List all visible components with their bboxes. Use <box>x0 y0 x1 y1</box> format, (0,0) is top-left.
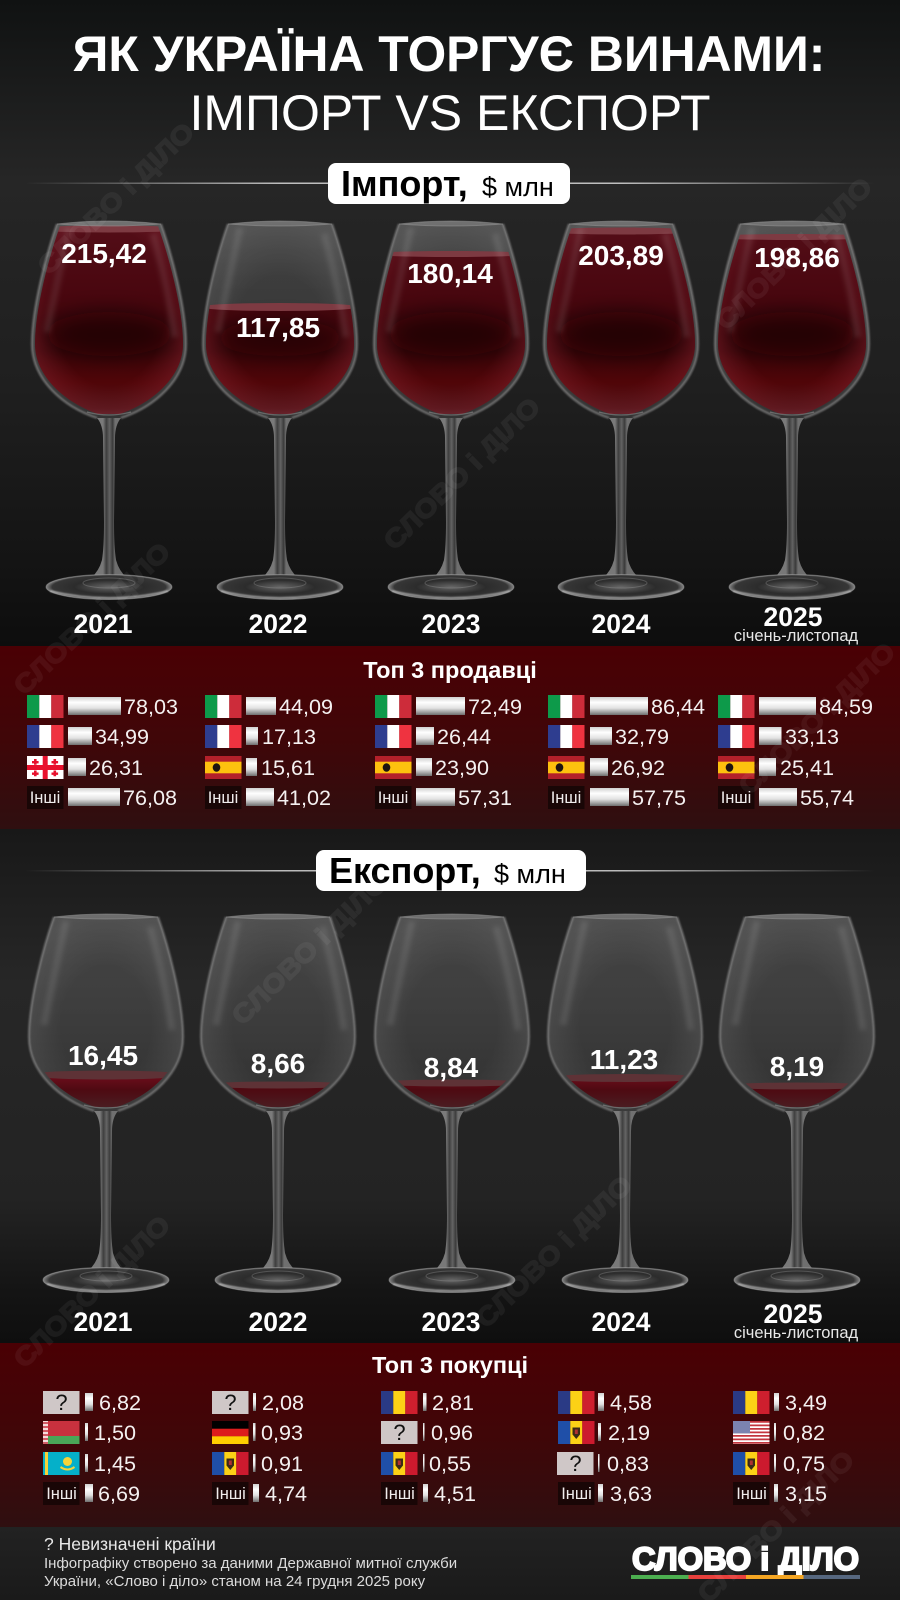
glass: import 2023: 180,14 <box>407 258 493 289</box>
column: buyers 2021: 1,50 <box>94 1420 136 1445</box>
column: sellers 2021: 78,03 <box>124 694 178 719</box>
year labels: export: 2024 <box>592 1307 651 1337</box>
glass: export 2022: 8,66 <box>251 1048 305 1079</box>
heading: top 3 sellers: Топ 3 продавці <box>363 657 537 683</box>
column: sellers 2021: 76,08 <box>123 785 177 810</box>
column: buyers 2021: ? <box>55 1390 68 1415</box>
glass: import 2025 <box>712 221 872 600</box>
column: buyers 2024: 3,63 <box>610 1481 652 1506</box>
column: buyers 2021 <box>43 1390 141 1506</box>
year labels: import <box>74 602 859 645</box>
column: buyers 2024: 0,83 <box>607 1451 649 1476</box>
column: sellers 2024 <box>548 694 705 810</box>
column: buyers 2021: 1,45 <box>94 1451 136 1476</box>
glass: import 2022: 117,85 <box>236 312 320 343</box>
column: buyers 2023: 2,81 <box>432 1390 474 1415</box>
column: sellers 2023: 23,90 <box>435 755 489 780</box>
glass: export 2024 <box>545 914 705 1292</box>
column: sellers 2023: Інші <box>378 789 408 807</box>
glass: export 2021 <box>26 914 186 1292</box>
watermarks: СЛОВО і ДІЛО <box>226 867 394 1031</box>
year labels: import: 2025 <box>764 602 822 632</box>
watermarks: СЛОВО і ДІЛО <box>470 1170 638 1334</box>
chart: export wine glasses <box>26 914 877 1292</box>
glass: export 2023: 8,84 <box>424 1052 479 1083</box>
column: sellers 2022: 15,61 <box>261 755 315 780</box>
title: ЯК УКРАЇНА ТОРГУЄ ВИНАМИ: <box>73 26 825 82</box>
glass: export 2021: 16,45 <box>68 1040 138 1071</box>
column: sellers 2023: 26,44 <box>437 724 491 749</box>
year labels: import: 2024 <box>592 609 651 639</box>
glass: export 2024: 11,23 <box>590 1044 658 1075</box>
column: buyers 2022: 4,74 <box>265 1481 307 1506</box>
heading: import: $ млн <box>482 172 554 202</box>
watermarks: СЛОВО і ДІЛО <box>8 537 176 701</box>
column: sellers 2025: 25,41 <box>780 755 834 780</box>
column: sellers 2023 <box>375 694 522 810</box>
watermarks: СЛОВО і ДІЛО <box>710 172 878 336</box>
glass: import 2022 <box>200 221 360 600</box>
column: buyers 2024: 4,58 <box>610 1390 652 1415</box>
panel: top 3 buyers <box>0 1343 900 1527</box>
watermarks: СЛОВО і ДІЛО <box>8 1210 176 1374</box>
column: sellers 2022: 17,13 <box>262 724 316 749</box>
column: sellers 2024: 26,92 <box>611 755 665 780</box>
title <box>73 26 825 141</box>
glass: export 2025 <box>717 914 877 1292</box>
column: buyers 2021: 6,69 <box>98 1481 140 1506</box>
column: sellers 2025: 33,13 <box>785 724 839 749</box>
year labels: import: 2023 <box>422 609 480 639</box>
column: sellers 2025: Інші <box>721 789 751 807</box>
column: buyers 2022: 2,08 <box>262 1390 304 1415</box>
column: buyers 2023 <box>381 1390 476 1506</box>
glass: import 2023 <box>371 221 531 600</box>
divider line: import <box>25 182 875 184</box>
footer note <box>44 1534 457 1590</box>
glass: import 2024: 203,89 <box>578 240 664 271</box>
column: buyers 2022: Інші <box>215 1485 246 1503</box>
year labels: export <box>74 1299 859 1342</box>
glass: import 2025: 198,86 <box>754 242 840 273</box>
column: buyers 2023: 0,96 <box>431 1420 473 1445</box>
glass: export 2022 <box>198 914 358 1292</box>
footer note: ? Невизначені країни <box>44 1534 216 1554</box>
title: ІМПОРТ VS ЕКСПОРТ <box>190 85 710 141</box>
column: buyers 2025: 3,15 <box>785 1481 827 1506</box>
year labels: import: 2022 <box>249 609 307 639</box>
column: sellers 2022: 41,02 <box>277 785 331 810</box>
column: sellers 2024: 32,79 <box>615 724 669 749</box>
column: sellers 2022 <box>205 694 333 810</box>
column: buyers 2025: Інші <box>736 1485 767 1503</box>
column: sellers 2021: Інші <box>30 789 60 807</box>
column: sellers 2021: 34,99 <box>95 724 149 749</box>
glass: import 2024 <box>541 221 701 600</box>
logo: СЛОВО і ДІЛО <box>632 1541 859 1577</box>
column: buyers 2024: 2,19 <box>608 1420 650 1445</box>
panel: top 3 sellers <box>0 646 900 829</box>
footer note: України, «Слово і діло» станом на 24 грудня 2025 року <box>44 1573 426 1590</box>
column: sellers 2025 <box>718 694 873 810</box>
heading: import <box>328 163 570 204</box>
heading: export: $ млн <box>494 859 566 889</box>
background: import section <box>0 0 900 646</box>
column: sellers 2024: 86,44 <box>651 694 705 719</box>
column: sellers 2022: Інші <box>208 789 238 807</box>
column: buyers 2022: 0,91 <box>261 1451 303 1476</box>
column: buyers 2025: 0,75 <box>783 1451 825 1476</box>
year labels: import: січень-листопад <box>734 627 859 645</box>
column: sellers 2024: Інші <box>551 789 581 807</box>
column: buyers 2021: 6,82 <box>99 1390 141 1415</box>
divider line: export <box>25 870 875 872</box>
watermarks: СЛОВО і ДІЛО <box>378 392 546 556</box>
column: buyers 2024: ? <box>569 1451 582 1476</box>
heading: import: Імпорт, <box>341 163 468 204</box>
column: buyers 2022: ? <box>224 1390 237 1415</box>
watermarks: СЛОВО і ДІЛО <box>32 117 200 281</box>
column: sellers 2023: 57,31 <box>458 785 512 810</box>
heading: export <box>316 850 586 891</box>
column: sellers 2021: 26,31 <box>89 755 143 780</box>
watermarks: СЛОВО і ДІЛО <box>733 637 900 801</box>
footer note: Інфографіку створено за даними Державної митної служби <box>44 1555 457 1572</box>
column: buyers 2021: Інші <box>46 1485 77 1503</box>
year labels: export: 2021 <box>74 1307 132 1337</box>
glass: import 2021: 215,42 <box>61 238 147 269</box>
glass: export 2023 <box>372 914 532 1292</box>
year labels: export: 2025 <box>764 1299 822 1329</box>
column: buyers 2023: ? <box>393 1420 406 1445</box>
column: buyers 2023: 4,51 <box>434 1481 476 1506</box>
column: sellers 2025: 55,74 <box>800 785 854 810</box>
column: sellers 2022: 44,09 <box>279 694 333 719</box>
column: sellers 2024: 57,75 <box>632 785 686 810</box>
column: buyers 2022: 0,93 <box>261 1420 303 1445</box>
heading: export: Експорт, <box>329 850 481 891</box>
year labels: import: 2021 <box>74 609 132 639</box>
year labels: export: 2023 <box>422 1307 480 1337</box>
column: sellers 2021 <box>27 694 178 810</box>
year labels: export: січень-листопад <box>734 1324 859 1342</box>
background: export section <box>0 829 900 1344</box>
column: buyers 2025: 0,82 <box>783 1420 825 1445</box>
column: buyers 2023: Інші <box>384 1485 415 1503</box>
glass: export 2025: 8,19 <box>770 1051 824 1082</box>
column: buyers 2025 <box>733 1390 827 1506</box>
background: footer <box>0 1526 900 1600</box>
column: buyers 2024: Інші <box>561 1485 592 1503</box>
column: sellers 2023: 72,49 <box>468 694 522 719</box>
column: sellers 2025: 84,59 <box>819 694 873 719</box>
column: buyers 2025: 3,49 <box>785 1390 827 1415</box>
heading: top 3 buyers: Топ 3 покупці <box>372 1352 528 1378</box>
column: buyers 2022 <box>212 1390 307 1506</box>
glass: import 2021 <box>29 221 189 600</box>
chart: import wine glasses <box>29 221 872 600</box>
column: buyers 2024 <box>557 1390 652 1506</box>
column: buyers 2023: 0,55 <box>429 1451 471 1476</box>
year labels: export: 2022 <box>249 1307 307 1337</box>
